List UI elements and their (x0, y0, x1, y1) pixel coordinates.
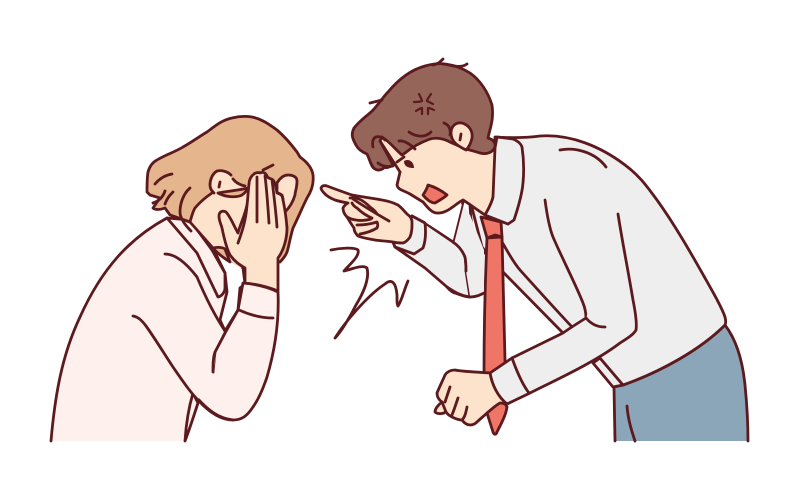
white gap above arm (425, 204, 462, 240)
hair top strands (433, 59, 443, 65)
woman: upset employee covering her face (51, 116, 313, 441)
tie knot (481, 217, 502, 238)
arm underside line (447, 287, 484, 297)
man's jaw outline (397, 172, 493, 215)
woman's blouse body (51, 218, 225, 441)
woman's chin shade (213, 247, 230, 262)
ear-side hair strand (444, 123, 450, 135)
ear detail (460, 134, 461, 140)
pointing arm (393, 216, 470, 297)
fist sleeve fill (490, 240, 636, 404)
hairline to fingers (233, 179, 245, 186)
hand finger lines (256, 177, 258, 222)
blouse lining at the hem (185, 393, 198, 441)
clenched fist (435, 370, 507, 425)
man: angry boss (321, 59, 748, 441)
front hair hook (373, 137, 385, 147)
hair edge beside face (190, 193, 212, 222)
blouse collar (167, 218, 225, 297)
face outline at jaw (190, 222, 213, 248)
woman's closed eye (218, 188, 248, 197)
tie blade (484, 237, 505, 374)
fist sleeve outline (490, 214, 636, 404)
hand back and index finger (321, 186, 412, 243)
arm top line to elbow (453, 242, 466, 271)
man's shirt torso (470, 136, 726, 385)
sleeve elbow curl (586, 318, 605, 327)
woman's sleeve (193, 283, 278, 420)
shirt chest and sleeve wrinkles (560, 149, 606, 167)
ear detail (219, 182, 220, 187)
tie (481, 217, 507, 434)
arm underside to chest fill (453, 205, 484, 296)
man's brow stroke (397, 157, 404, 162)
woman's hair (147, 116, 313, 262)
ear outline (210, 171, 231, 193)
blouse back outline (51, 218, 167, 441)
man's hair (352, 64, 495, 170)
sleeve fold (213, 333, 225, 372)
shirt placket lines (470, 200, 485, 253)
lock line (378, 163, 393, 167)
man's eye (404, 160, 414, 168)
sleeve cuff divider (512, 358, 529, 393)
sleeve cuff line (239, 310, 273, 318)
chest line from neck (453, 202, 463, 242)
tie lower tip (487, 395, 507, 434)
man's spike face edge (380, 141, 400, 172)
woman's hand over face (219, 172, 287, 291)
woman's visible cheek behind fingers (277, 175, 297, 212)
man's ear (451, 123, 472, 150)
sleeve body fill patch over chest (143, 290, 222, 399)
sleeve upper wrinkle (133, 316, 233, 420)
anger mark (414, 94, 434, 114)
thumb line (353, 199, 389, 221)
man's trousers (614, 325, 748, 441)
collar flap line (485, 215, 508, 224)
middle finger lines (352, 203, 372, 218)
man's collar fill strip (485, 137, 524, 224)
fist shape (435, 370, 507, 425)
pointing cuff (393, 216, 426, 254)
hair curl above brow (409, 132, 431, 136)
index finger crease and thumb (350, 198, 377, 214)
burst: jagged shout line (331, 248, 408, 338)
fist finger lines (445, 387, 450, 402)
man's mouth (423, 185, 447, 203)
woman's ear fill (211, 171, 246, 197)
pointing hand (321, 186, 426, 254)
shirt hem below the arm (593, 358, 623, 387)
chest wrinkle (165, 254, 225, 331)
man's shirt front line (502, 242, 573, 328)
white gap between arm and chest (213, 248, 245, 331)
man's face (380, 110, 495, 215)
anger mark strokes (414, 94, 422, 102)
hair side locks (155, 174, 172, 184)
trouser crease (627, 406, 635, 441)
woman's face (190, 180, 290, 268)
